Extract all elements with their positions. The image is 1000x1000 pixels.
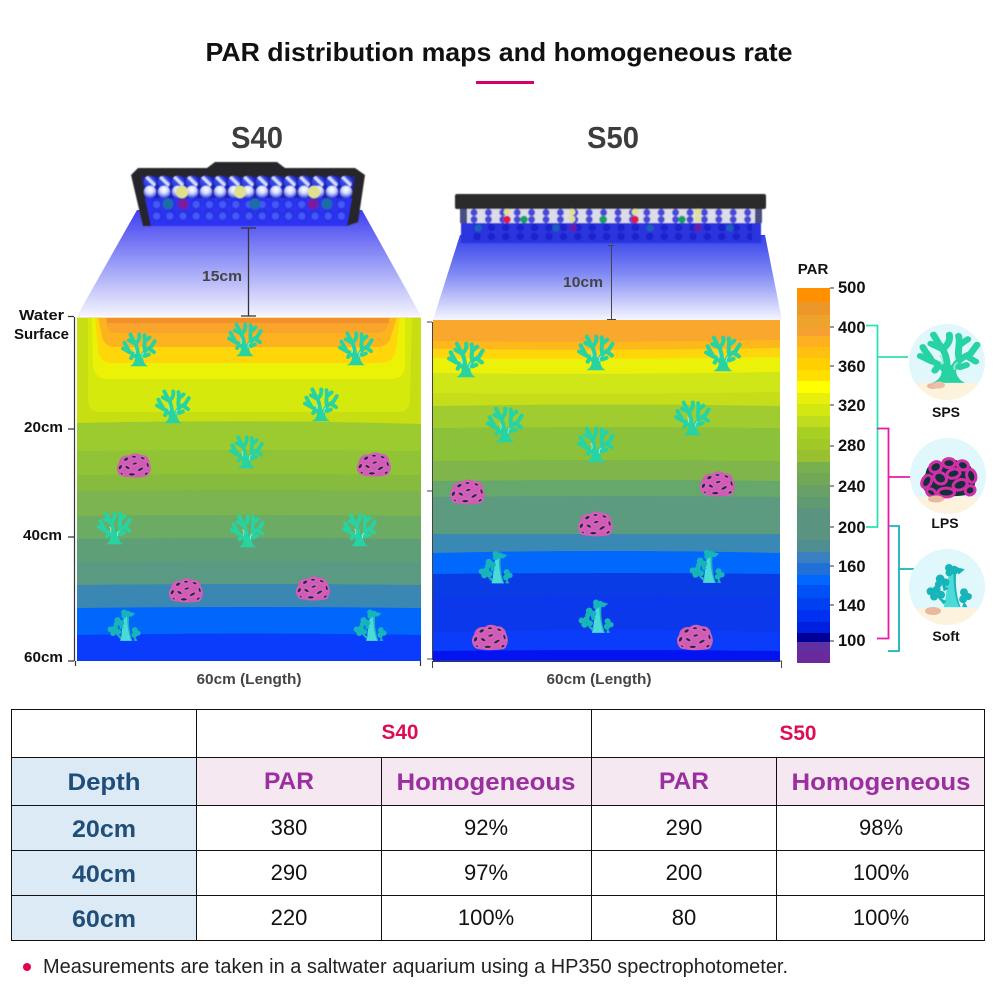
fixture S50 xyxy=(455,194,766,243)
column headers: Homogeneous xyxy=(792,769,970,796)
bracket: LPS range xyxy=(877,428,911,638)
bracket: soft coral range xyxy=(888,526,915,651)
SPS coral xyxy=(340,333,372,365)
label: SPS: SPS xyxy=(932,404,960,420)
soft coral xyxy=(354,610,387,641)
scale labels: 320 xyxy=(838,397,866,415)
fixture S40 xyxy=(131,162,365,226)
label: LPS: LPS xyxy=(931,515,959,531)
soft coral xyxy=(690,550,725,583)
SPS coral xyxy=(305,389,337,421)
light cone S40 xyxy=(77,210,421,316)
model headers: S40 xyxy=(382,721,418,744)
scale labels: 200 xyxy=(838,519,866,537)
scale labels: 400 xyxy=(838,319,866,337)
PAR colour scale xyxy=(797,261,866,663)
length label S50: 60cm (Length) xyxy=(546,672,652,688)
corals S50 xyxy=(449,337,740,650)
header cell fills xyxy=(12,758,984,940)
row: 40cm: 100% xyxy=(853,860,909,885)
SPS coral xyxy=(579,429,613,462)
footnote: Measurements are taken in a saltwater aquarium using a HP350 spectrophotometer. xyxy=(43,956,788,978)
LPS coral xyxy=(700,472,735,496)
row: 20cm xyxy=(72,815,903,843)
scale labels: 500 xyxy=(838,279,866,297)
distance marker 10cm xyxy=(563,246,616,320)
length label S40: 60cm (Length) xyxy=(196,672,302,688)
SPS coral xyxy=(157,391,189,423)
row: 20cm: 290 xyxy=(666,815,702,840)
heat map S40 xyxy=(77,316,421,662)
SPS coral xyxy=(229,324,261,356)
icon: soft coral xyxy=(909,549,985,625)
depth axis S40: 20cm xyxy=(24,419,63,436)
light cone S50 xyxy=(433,235,782,320)
colour bar xyxy=(797,288,830,663)
SPS coral xyxy=(231,437,262,468)
row: 20cm: 380 xyxy=(271,815,307,840)
SPS coral xyxy=(706,338,740,371)
axes S50 xyxy=(427,322,782,668)
row: 60cm: 80 xyxy=(672,905,696,930)
scale labels: 160 xyxy=(838,558,866,576)
depth axis S40: 40cm xyxy=(23,527,62,544)
soft coral xyxy=(108,610,141,641)
data table xyxy=(12,710,984,940)
soft coral xyxy=(479,551,513,583)
scale labels xyxy=(838,279,866,650)
depth axis S40: Surface xyxy=(14,326,69,343)
LPS coral xyxy=(578,512,613,536)
title underline xyxy=(476,81,534,84)
SPS coral xyxy=(676,403,709,435)
SPS coral xyxy=(123,334,155,366)
LPS coral xyxy=(117,453,151,478)
heading: S50: S50 xyxy=(587,120,639,155)
table grid xyxy=(12,710,984,940)
distance marker 15cm: 15cm xyxy=(202,268,242,285)
bracket: SPS range xyxy=(866,326,908,527)
SPS coral xyxy=(344,515,375,546)
row: 40cm: 97% xyxy=(464,860,508,885)
LPS coral xyxy=(296,576,330,601)
distance marker 15cm xyxy=(202,228,256,316)
row: 60cm: 220 xyxy=(271,905,307,930)
column headers xyxy=(68,768,970,796)
scale labels: 360 xyxy=(838,358,866,376)
scale labels: 240 xyxy=(838,478,866,496)
LPS coral xyxy=(169,578,203,603)
panel: S50 xyxy=(427,120,782,688)
heading: S40: S40 xyxy=(231,120,283,155)
row: 40cm: 290 xyxy=(271,860,307,885)
LPS coral xyxy=(472,625,508,650)
icon: SPS coral xyxy=(909,324,985,400)
row: 60cm xyxy=(72,905,909,933)
column headers: PAR xyxy=(264,768,314,795)
row: 60cm: 100% xyxy=(458,905,514,930)
corals S40 xyxy=(99,324,391,641)
soft coral xyxy=(579,600,614,633)
scale labels: 280 xyxy=(838,437,866,455)
SPS coral xyxy=(579,337,613,370)
row: 40cm: 40cm xyxy=(72,861,136,888)
legend title: PAR xyxy=(798,261,828,278)
heat map S50 xyxy=(433,320,780,662)
row: 60cm: 100% xyxy=(853,905,909,930)
column headers: PAR xyxy=(659,768,709,795)
depth axis S40: Water xyxy=(19,307,64,324)
title: PAR distribution maps and homogeneous rate xyxy=(206,37,792,67)
row: 40cm: 200 xyxy=(666,860,702,885)
SPS coral xyxy=(99,513,130,544)
column headers: Depth xyxy=(68,769,140,796)
data table: S50 xyxy=(780,722,816,745)
LPS coral xyxy=(677,625,713,650)
scale ticks xyxy=(830,288,834,641)
panel: S40 xyxy=(14,120,421,688)
label: Soft: Soft xyxy=(932,628,960,644)
distance marker 10cm: 10cm xyxy=(563,274,603,291)
depth axis S40 xyxy=(14,307,420,666)
LPS coral xyxy=(357,452,391,477)
SPS coral xyxy=(232,516,263,547)
row: 60cm: 60cm xyxy=(72,906,136,933)
row: 20cm: 20cm xyxy=(72,816,136,843)
LPS coral xyxy=(450,480,485,504)
row: 20cm: 92% xyxy=(464,815,508,840)
SPS coral xyxy=(449,344,483,377)
scale labels: 140 xyxy=(838,597,866,615)
scale labels: 100 xyxy=(838,632,866,650)
row: 20cm: 98% xyxy=(859,815,903,840)
icon: LPS coral xyxy=(910,438,986,514)
depth axis S40: 60cm xyxy=(24,649,63,666)
SPS coral xyxy=(488,409,522,442)
row: 40cm xyxy=(72,860,909,888)
column headers: Homogeneous xyxy=(396,769,576,796)
